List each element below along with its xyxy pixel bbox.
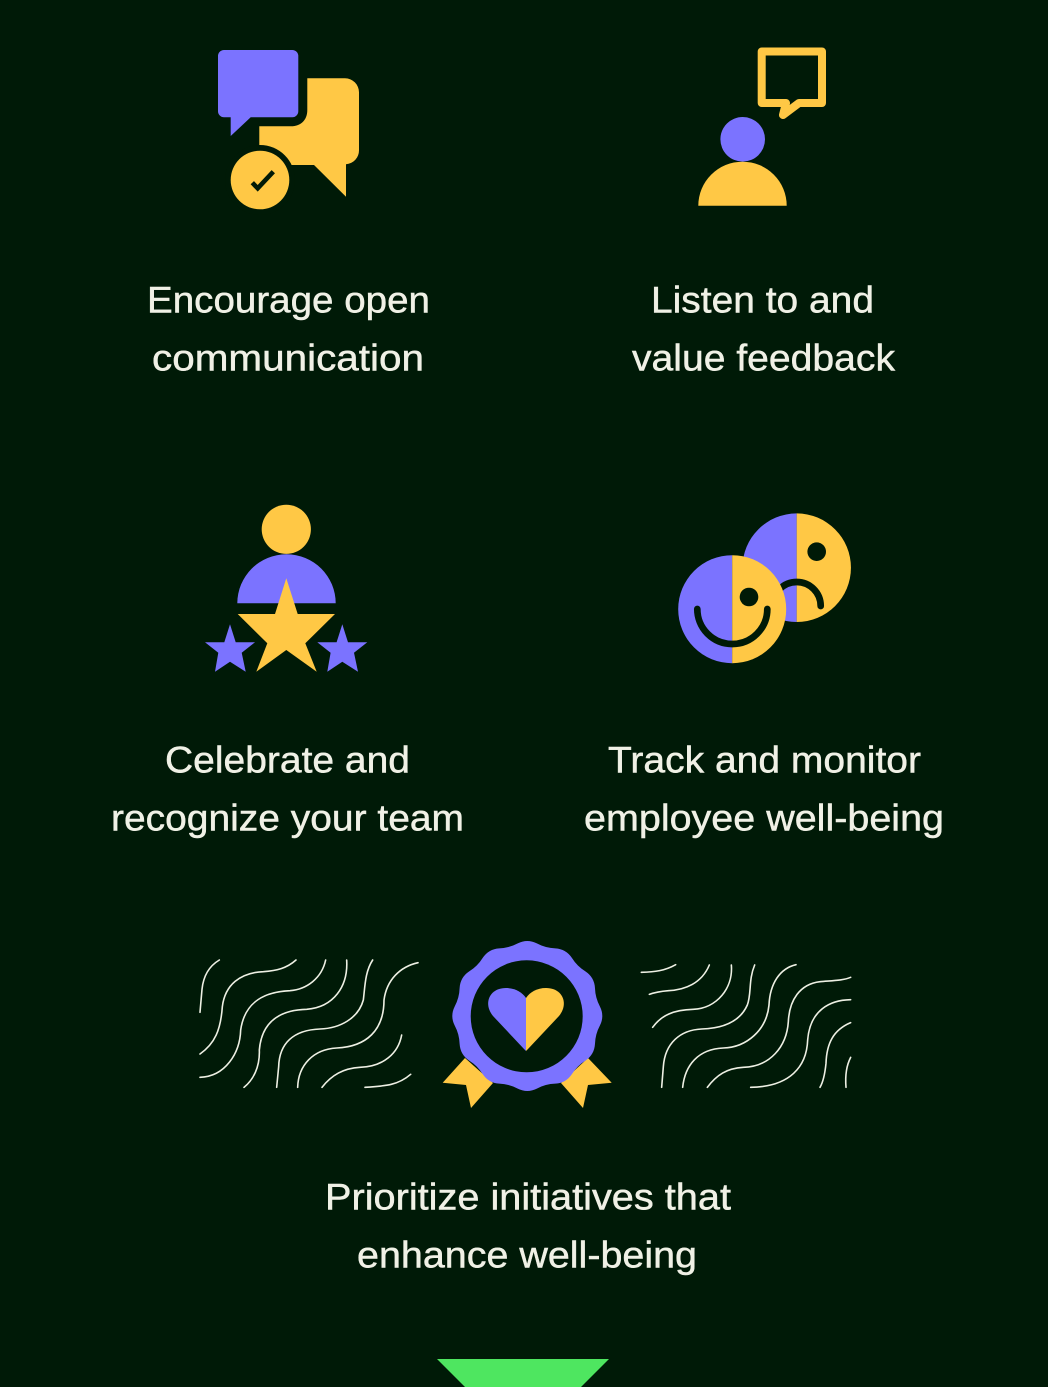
- panel: track and monitor employee well-being: [584, 513, 944, 838]
- icon: person with three stars: [205, 505, 367, 672]
- green downward arrow: [437, 1359, 609, 1387]
- label: track and monitor employee well-being: [584, 739, 944, 838]
- wavy lines left: [200, 960, 418, 1087]
- label: listen to and value feedback: Listen to and: [651, 279, 874, 320]
- panel: celebrate and recognize your team: [111, 505, 464, 838]
- icon: two half-coloured mood faces: [678, 513, 851, 663]
- panel: encourage open communication: [147, 50, 430, 378]
- icon: person with speech bubble: [698, 52, 822, 206]
- label: celebrate and recognize your team: Celebrate and: [165, 739, 410, 780]
- label: prioritize initiatives that enhance well-being: [325, 1176, 732, 1275]
- wavy lines right: [641, 965, 851, 1087]
- icon: chat bubbles with check: [218, 50, 359, 215]
- label: track and monitor employee well-being: employee well-being: [584, 797, 944, 838]
- label: prioritize initiatives that enhance well-being: enhance well-being: [357, 1234, 697, 1275]
- panel: listen to and value feedback: [632, 52, 896, 378]
- label: listen to and value feedback: value feedback: [632, 337, 896, 378]
- label: prioritize initiatives that enhance well-being: Prioritize initiatives that: [325, 1176, 732, 1217]
- label: encourage open communication: Encourage open: [147, 279, 430, 320]
- panel: prioritize initiatives: [200, 941, 851, 1275]
- label: listen to and value feedback: [632, 279, 896, 378]
- label: celebrate and recognize your team: [111, 739, 464, 838]
- label: encourage open communication: [147, 279, 430, 378]
- label: encourage open communication: communication: [152, 337, 424, 378]
- label: celebrate and recognize your team: recognize your team: [111, 797, 464, 838]
- icon: award rosette with heart: [443, 941, 612, 1108]
- label: track and monitor employee well-being: Track and monitor: [608, 739, 921, 780]
